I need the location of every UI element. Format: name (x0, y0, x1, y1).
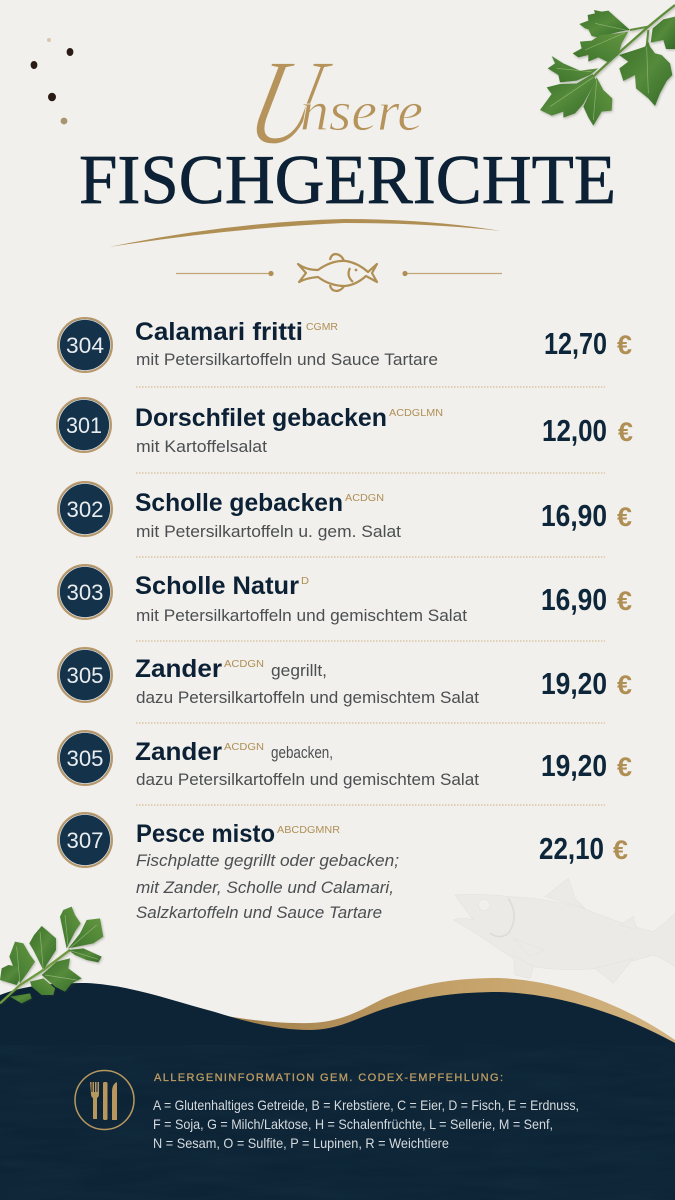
price: 16,90 (541, 498, 607, 533)
number badge 304 (58, 318, 112, 372)
price: 22,10 (539, 831, 604, 866)
allergen legend: N = Sesam, O = Sulfite, P = Lupinen, R = Weichtiere (153, 1135, 449, 1151)
allergens: ACDGN (345, 492, 384, 504)
parsley bottom left (0, 907, 103, 1003)
gold brush stroke (109, 219, 501, 247)
number badge 303 (58, 565, 112, 619)
menu item 307 (58, 813, 628, 922)
number badge 305: 305 (66, 746, 104, 771)
title: Unsere: nsere (300, 81, 423, 143)
allergens: ACDGN (224, 741, 264, 753)
description: Salzkartoffeln und Sauce Tartare (136, 904, 382, 922)
preparation: gebacken, (271, 744, 333, 762)
allergens: CGMR (306, 321, 338, 333)
menu item 302 (58, 482, 632, 541)
price: € (617, 502, 632, 532)
menu item 304 (58, 318, 632, 372)
price: € (617, 330, 632, 360)
allergen heading: ALLERGENINFORMATION GEM. CODEX-EMPFEHLUNG: (154, 1072, 503, 1084)
price: € (618, 417, 633, 447)
number badge 307 (58, 813, 112, 867)
dark wave panel (0, 983, 675, 1200)
dish name: Dorschfilet gebacken (135, 404, 387, 432)
price: € (617, 752, 632, 782)
number badge 305: 305 (66, 663, 104, 688)
allergens: ACDGN (224, 658, 264, 670)
icon: cutlery (75, 1070, 134, 1130)
title: Unsere: U (236, 35, 342, 170)
allergens: ABCDGMNR (277, 824, 340, 836)
description: dazu Petersilkartoffeln und gemischtem Salat (136, 689, 479, 707)
number badge 305 (58, 731, 112, 785)
preparation: gegrillt, (271, 662, 327, 680)
allergen legend (153, 1097, 579, 1151)
menu item 305 grilled (58, 648, 632, 707)
fish divider (176, 254, 502, 291)
dish name: Pesce misto (136, 820, 275, 848)
description (136, 852, 399, 922)
price: 16,90 (541, 582, 607, 617)
number badge 304: 304 (66, 333, 104, 358)
dish name: Zander (135, 738, 222, 766)
number badge 302: 302 (66, 497, 104, 522)
dish name: Calamari fritti (135, 318, 303, 346)
description: mit Petersilkartoffeln und Sauce Tartare (136, 351, 438, 369)
price: 12,70 (544, 326, 607, 361)
description: mit Petersilkartoffeln u. gem. Salat (136, 523, 401, 541)
title: Unsere (236, 35, 423, 170)
price: 12,00 (542, 413, 607, 448)
price: 19,20 (541, 748, 607, 783)
price: € (617, 586, 632, 616)
icon: parsley top right (540, 5, 675, 126)
ghost fish illustration (453, 878, 675, 983)
number badge 301: 301 (66, 413, 102, 438)
dish name: Scholle Natur (135, 572, 299, 600)
title: Fischgerichte: FISCHGERICHTE (79, 142, 616, 219)
description: mit Kartoffelsalat (136, 438, 267, 456)
menu item 305 baked (58, 731, 632, 789)
allergens: ACDGLMN (389, 407, 443, 419)
menu item 301 (57, 398, 633, 456)
number badge 301 (57, 398, 111, 452)
allergens: D (301, 575, 309, 587)
dish name: Zander (135, 655, 222, 683)
gold wave (200, 978, 675, 1100)
peppercorns (31, 38, 73, 124)
price: € (617, 670, 632, 700)
description: Fischplatte gegrillt oder gebacken; (136, 852, 399, 870)
allergen legend: F = Soja, G = Milch/Laktose, H = Schalenfrüchte, L = Sellerie, M = Senf, (153, 1116, 553, 1132)
number badge 305 (58, 648, 112, 702)
description: dazu Petersilkartoffeln und gemischtem Salat (136, 771, 479, 789)
number badge 303: 303 (66, 580, 104, 605)
description: mit Petersilkartoffeln und gemischtem Salat (136, 607, 467, 625)
price: 19,20 (541, 666, 607, 701)
number badge 302 (58, 482, 112, 536)
description: mit Zander, Scholle und Calamari, (136, 879, 394, 897)
price: € (613, 835, 628, 865)
dish name: Scholle gebacken (135, 489, 343, 517)
number badge 307: 307 (66, 828, 104, 853)
menu item 303 (58, 565, 632, 625)
allergen legend: A = Glutenhaltiges Getreide, B = Krebstiere, C = Eier, D = Fisch, E = Erdnuss, (153, 1097, 579, 1113)
